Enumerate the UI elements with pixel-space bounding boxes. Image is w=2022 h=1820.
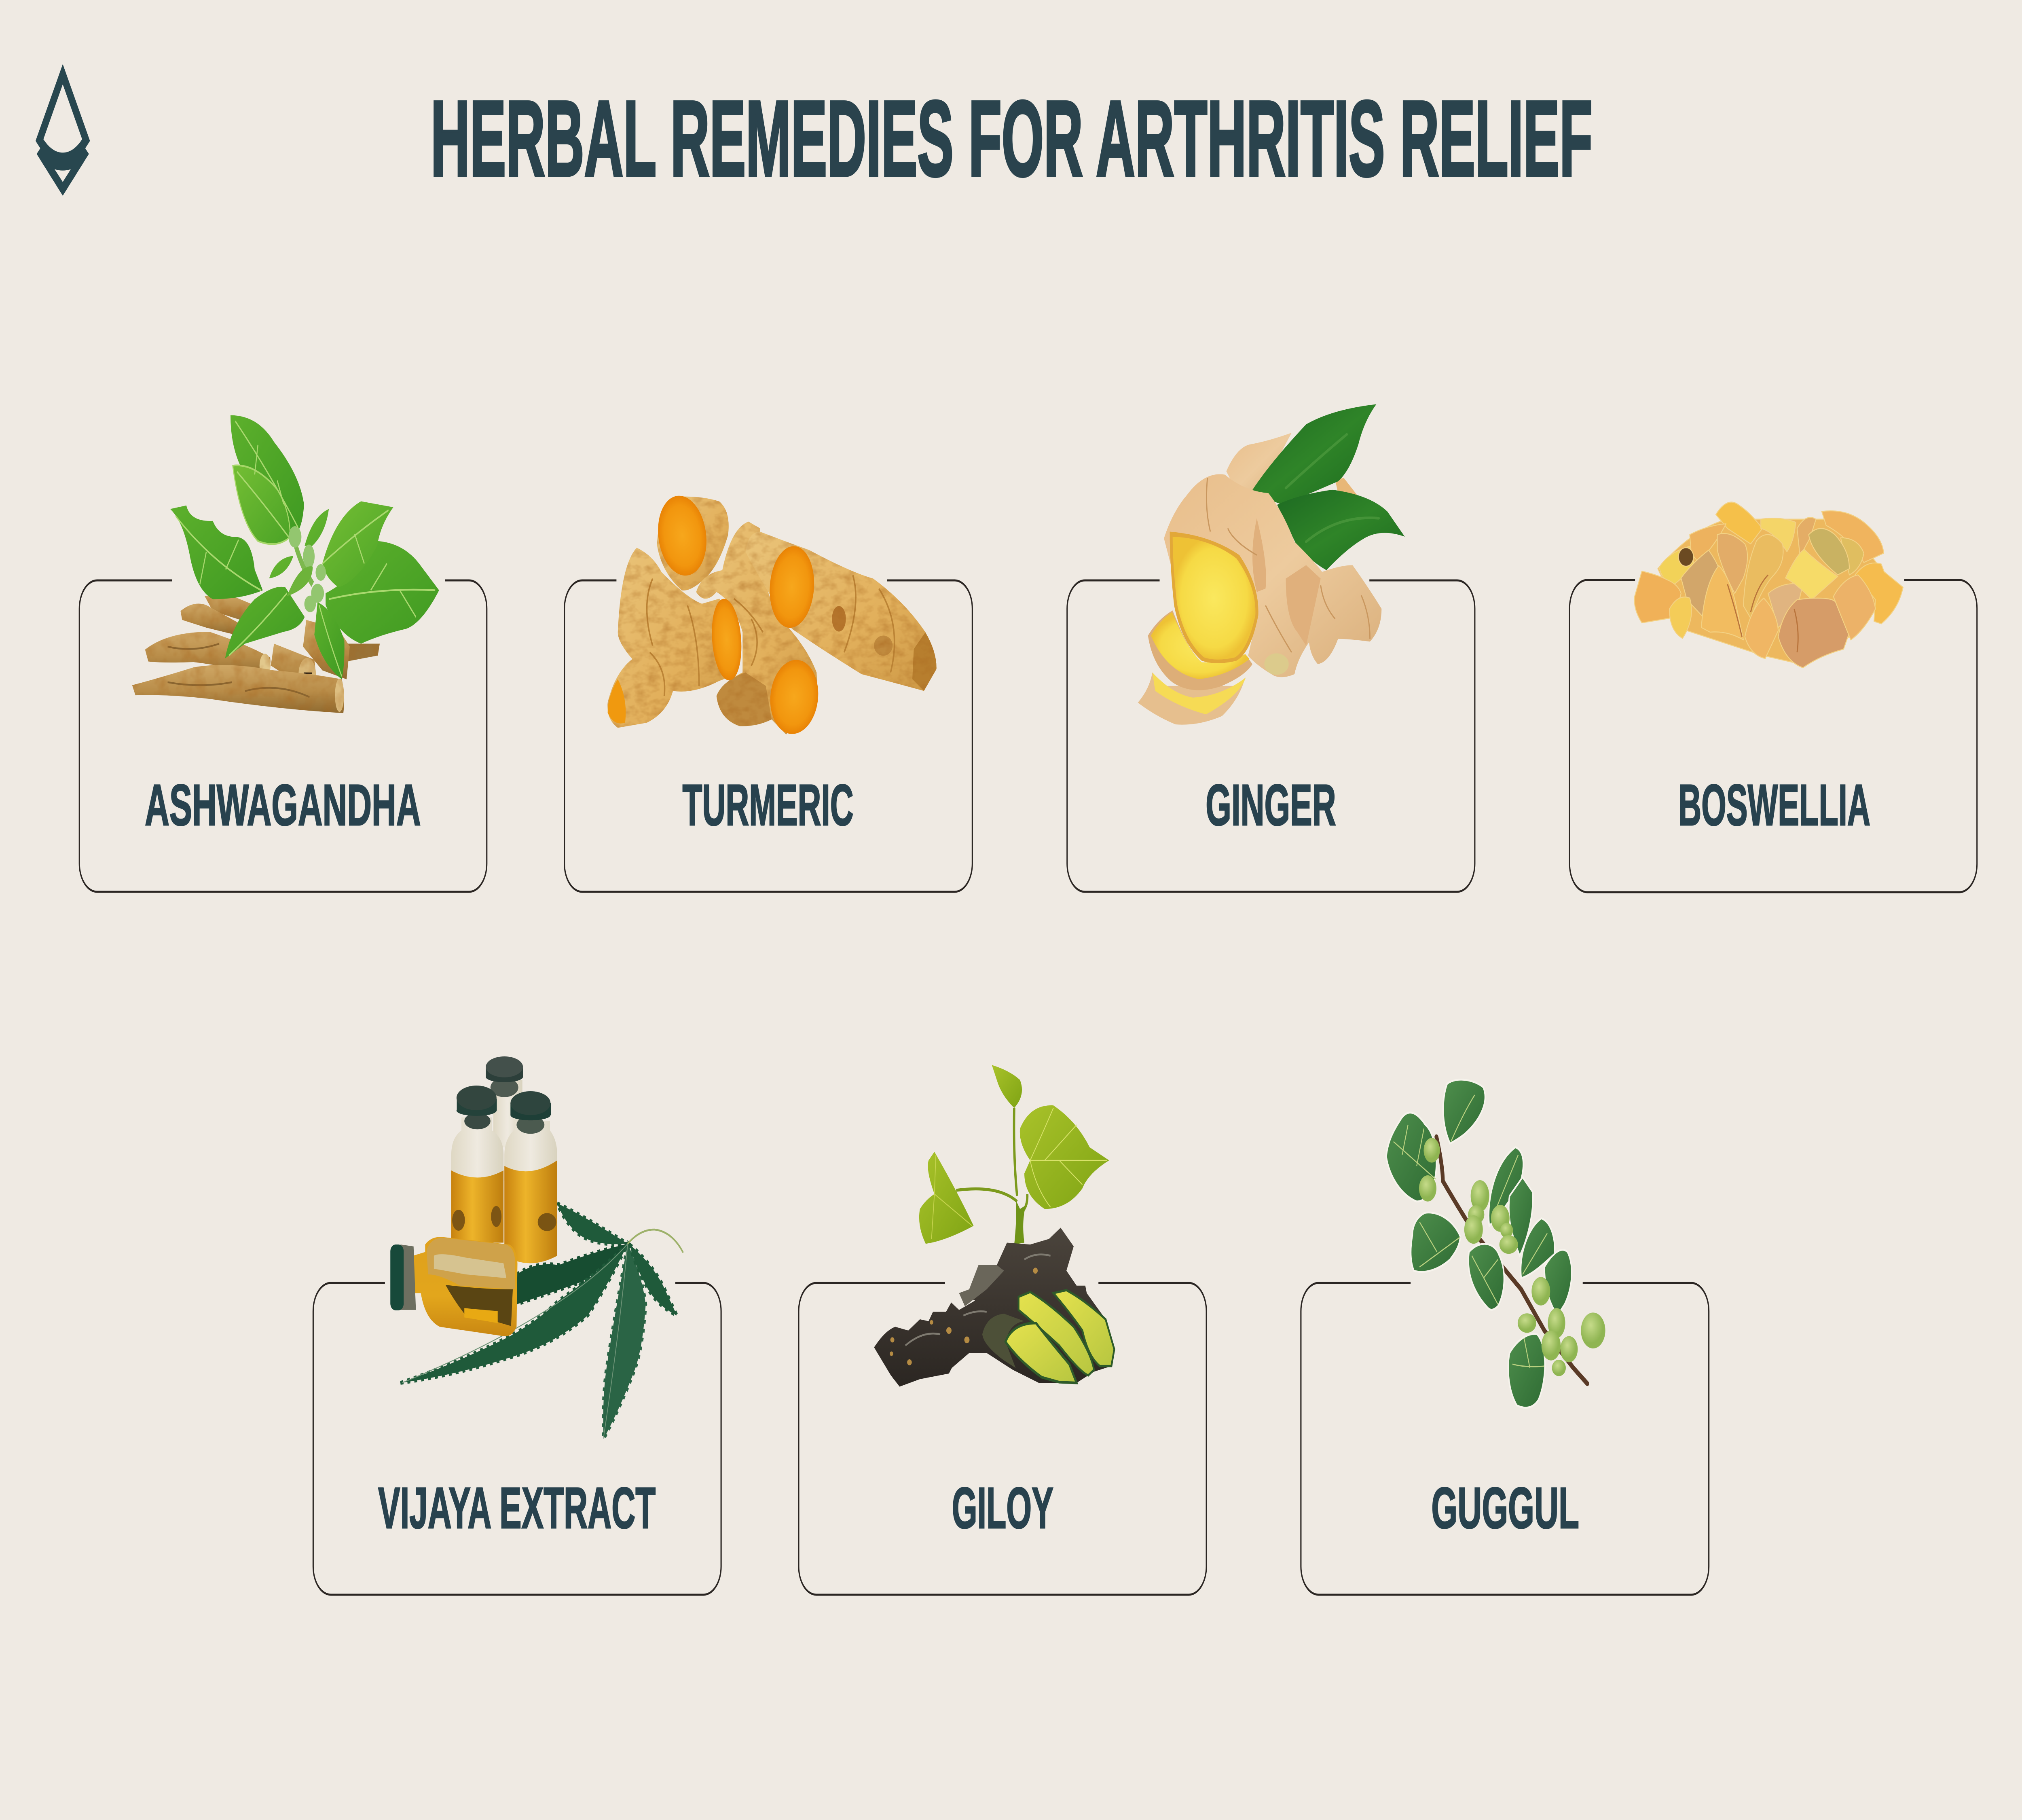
icon: ginger root with leaves: [1138, 404, 1405, 725]
panel: boswellia: [1569, 502, 1977, 892]
label: GILOY: [952, 1475, 1053, 1541]
icon: guggul branch: [1386, 1079, 1605, 1407]
label: ASHWAGANDHA: [145, 772, 421, 838]
label: TURMERIC: [683, 772, 854, 838]
title: HERBAL REMEDIES FOR ARTHRITIS RELIEF: [431, 78, 1593, 198]
card frame: [799, 1283, 1206, 1595]
label: GUGGUL: [1431, 1475, 1579, 1541]
card frame: [313, 1283, 721, 1595]
card frame: [565, 580, 972, 892]
card frame: [1067, 580, 1475, 892]
panel: guggul: [1301, 1079, 1709, 1595]
panel: ashwagandha: [79, 415, 487, 892]
label: GINGER: [1206, 772, 1336, 838]
icon: boswellia resin pile: [1635, 502, 1903, 668]
panel: ginger: [1067, 404, 1475, 892]
icon: ashwagandha leaves and roots: [132, 415, 439, 713]
panel: vijaya extract: [313, 1056, 721, 1595]
icon: turmeric roots: [607, 491, 937, 738]
panel: giloy: [799, 1065, 1206, 1595]
icon: brand logo: [36, 64, 90, 196]
label: VIJAYA EXTRACT: [378, 1475, 656, 1541]
icon: giloy stem and leaves: [874, 1065, 1114, 1386]
card frame: [1301, 1283, 1709, 1595]
card frame: [1569, 580, 1977, 892]
card frame: [79, 580, 487, 892]
label: BOSWELLIA: [1678, 772, 1870, 838]
icon: oil vials and leaf: [390, 1056, 683, 1439]
panel: turmeric: [565, 491, 972, 892]
